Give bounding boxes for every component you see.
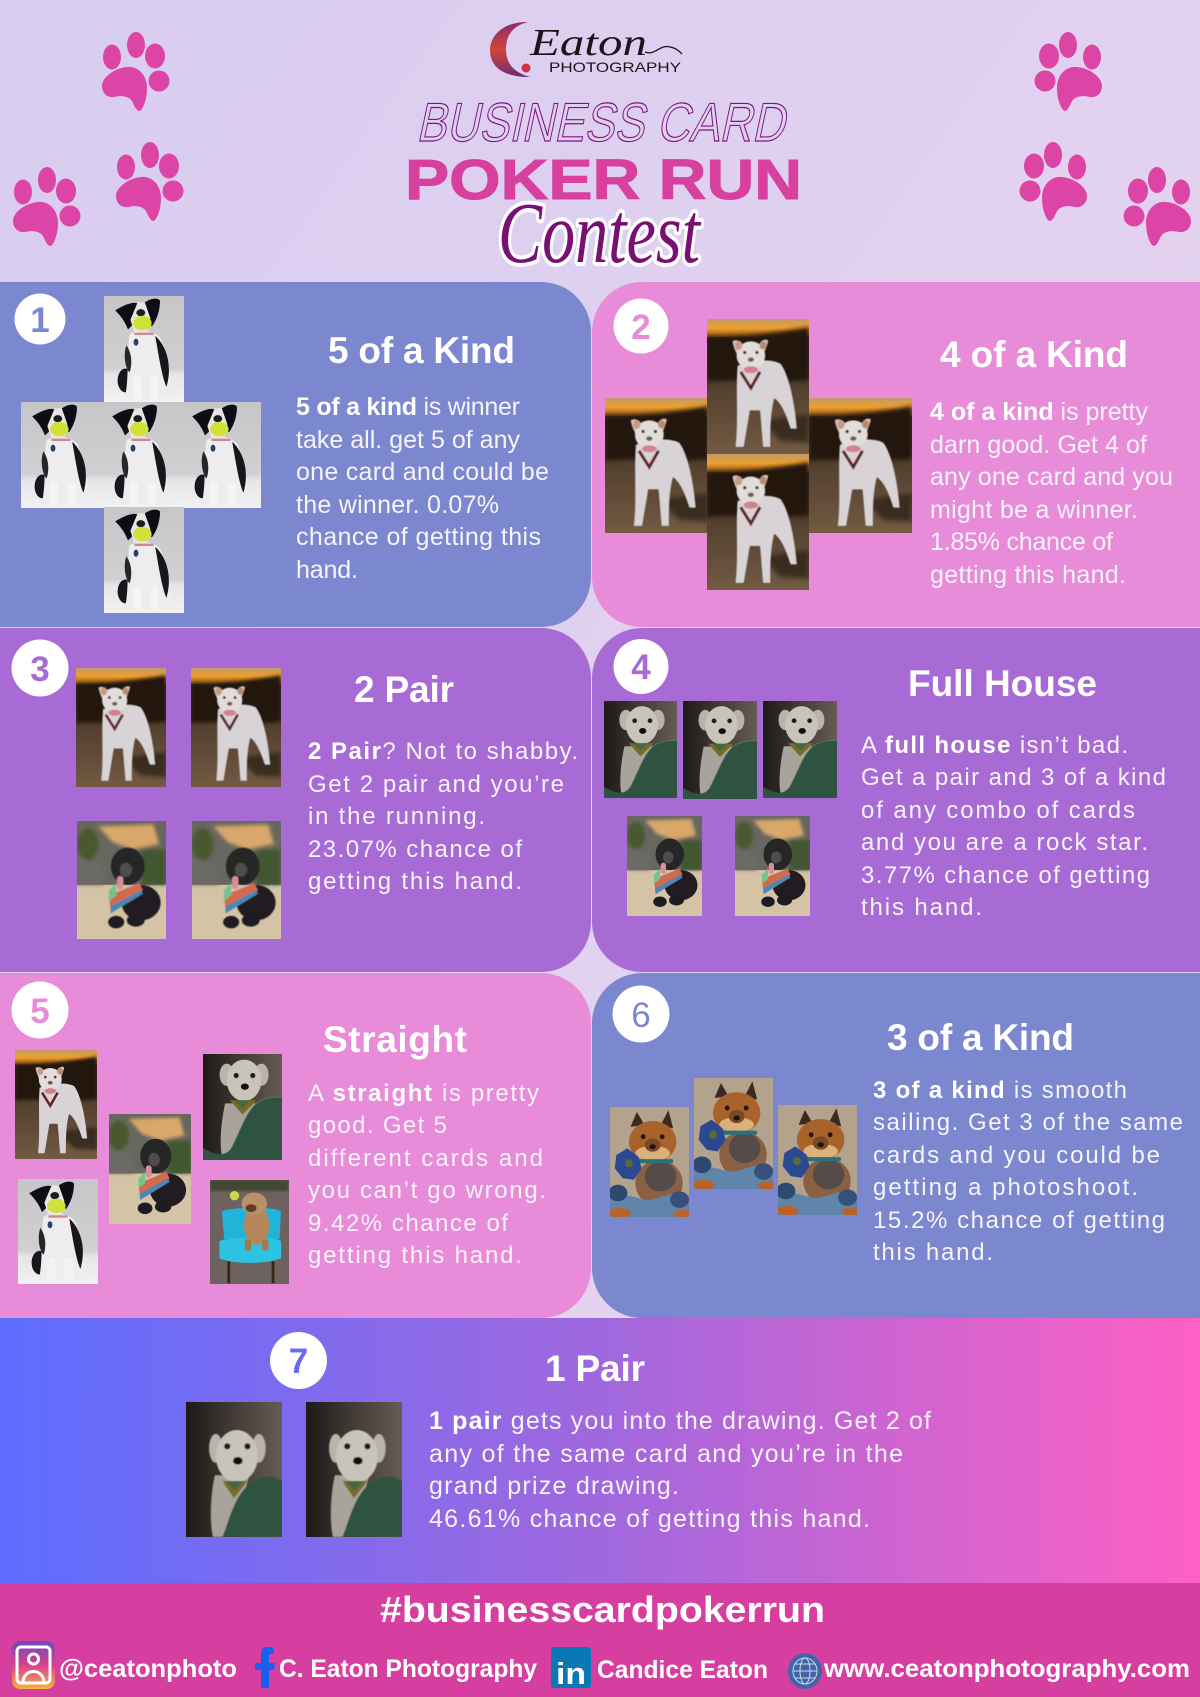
body text [429,1407,931,1533]
number badge 2: 2 [631,308,651,347]
body text: sailing. Get 3 of the same [873,1109,1183,1136]
body text: 2 Pair? Not to shabby. [308,738,578,765]
icon: paw 2 [116,142,184,221]
body text: chance of getting this [296,523,541,551]
body text: A straight is pretty [308,1080,539,1107]
social: facebook name: C. Eaton Photography [279,1655,537,1683]
body text: this hand. [861,894,982,921]
icon: paw 6 [1124,167,1191,246]
title: 5 of a Kind [328,330,515,371]
body text: hand. [296,556,358,584]
cards: one pair [186,1402,402,1537]
body text: 46.61% chance of getting this hand. [429,1505,870,1533]
number badge 5: 5 [30,992,50,1031]
panel 1: 5 of a Kind [0,282,591,627]
body text: different cards and [308,1145,543,1172]
number badge 6 [612,986,670,1042]
logo: Eaton Photography: Eaton [529,22,647,64]
body text: 5 of a kind is winner [296,393,520,421]
number badge 3 [12,640,68,696]
body text [873,1077,1183,1266]
icon: paw 5 [1020,142,1087,221]
title: 3 of a Kind [887,1017,1074,1058]
cards: four pit bulls [605,319,912,590]
body text: any one card and you [930,463,1173,491]
body text: one card and could be [296,458,549,486]
title: Straight [323,1019,467,1060]
number badge 7 [270,1332,327,1389]
cards: five collies [21,296,261,613]
cards: straight [15,1050,289,1284]
body text: 1 pair gets you into the drawing. Get 2 of [429,1407,931,1435]
body text [308,1080,546,1269]
body text: Get a pair and 3 of a kind [861,764,1166,791]
panel 4: Full House [592,628,1200,972]
panel 5: Straight [0,973,591,1318]
title: Full House [908,663,1097,704]
icon: paw 3 [13,167,80,246]
body text: grand prize drawing. [429,1472,679,1500]
icon: linkedin: in [556,1656,586,1691]
title: 1 Pair [545,1348,645,1389]
body text: this hand. [873,1239,993,1266]
body text: cards and you could be [873,1142,1160,1169]
body text: darn good. Get 4 of [930,431,1147,459]
logo: Eaton Photography [490,22,682,77]
panel 2: 4 of a Kind [592,282,1200,627]
body text: 15.2% chance of getting [873,1207,1165,1234]
body text: of any combo of cards [861,797,1135,824]
body text [296,393,549,584]
number badge 4 [614,639,668,694]
number badge 4: 4 [631,648,651,687]
body text: take all. get 5 of any [296,426,520,454]
body text: 1.85% chance of [930,528,1113,556]
body text: any of the same card and you’re in the [429,1440,903,1468]
body text: getting this hand. [308,1242,522,1269]
panel 7: 1 Pair [0,1318,1200,1583]
body text: getting a photoshoot. [873,1174,1138,1201]
body text: Get 2 pair and you’re [308,771,564,798]
icon: globe [788,1653,822,1689]
body text [308,738,578,895]
body text: 3 of a kind is smooth [873,1077,1127,1104]
title: 4 of a Kind [940,334,1128,375]
cards: two pairs [76,668,281,939]
social: website: www.ceatonphotography.com [823,1655,1190,1683]
body text: and you are a rock star. [861,829,1148,856]
cards: three pomeranians [608,1078,859,1218]
body text: in the running. [308,803,485,830]
icon: linkedin [551,1647,591,1691]
icon: paw prints left [13,32,184,246]
title: 2 Pair [354,669,454,710]
body text: getting this hand. [930,561,1126,589]
number badge 5 [12,982,68,1038]
heading: Poker Run: POKER RUN [405,148,802,212]
body text: might be a winner. [930,496,1138,524]
body text: 4 of a kind is pretty [930,398,1148,426]
icon: paw prints right [1020,32,1191,246]
heading: Contest: Contest [498,184,702,281]
icon: instagram [12,1641,55,1689]
number badge 3: 3 [30,650,50,689]
logo: Eaton Photography: PHOTOGRAPHY [549,59,682,75]
cards: full house [604,701,837,916]
number badge 7: 7 [289,1342,308,1381]
hashtag: #businesscardpokerrun [380,1589,825,1630]
number badge 1 [14,294,66,344]
panel 3: 2 Pair [0,628,591,972]
number badge 6: 6 [631,996,651,1035]
icon: paw 4 [1034,32,1102,111]
body text: 3.77% chance of getting [861,862,1150,889]
social: instagram handle: @ceatonphoto [59,1655,237,1683]
body text: A full house isn’t bad. [861,732,1128,759]
number badge 2 [614,298,668,354]
body text: 9.42% chance of [308,1210,508,1237]
body text: 23.07% chance of [308,836,522,863]
icon: paw 1 [102,32,170,111]
body text [930,398,1173,589]
heading: Business Card: BUSINESS CARD [413,92,794,153]
footer band [0,1583,1200,1697]
panel 6: 3 of a Kind [592,973,1200,1318]
body text: getting this hand. [308,868,522,895]
body text: you can’t go wrong. [308,1177,546,1204]
body text [861,732,1166,921]
icon: facebook [255,1647,275,1688]
body text: the winner. 0.07% [296,491,499,519]
number badge 1: 1 [30,301,50,340]
body text: good. Get 5 [308,1112,447,1139]
social: linkedin name: Candice Eaton [597,1656,768,1684]
